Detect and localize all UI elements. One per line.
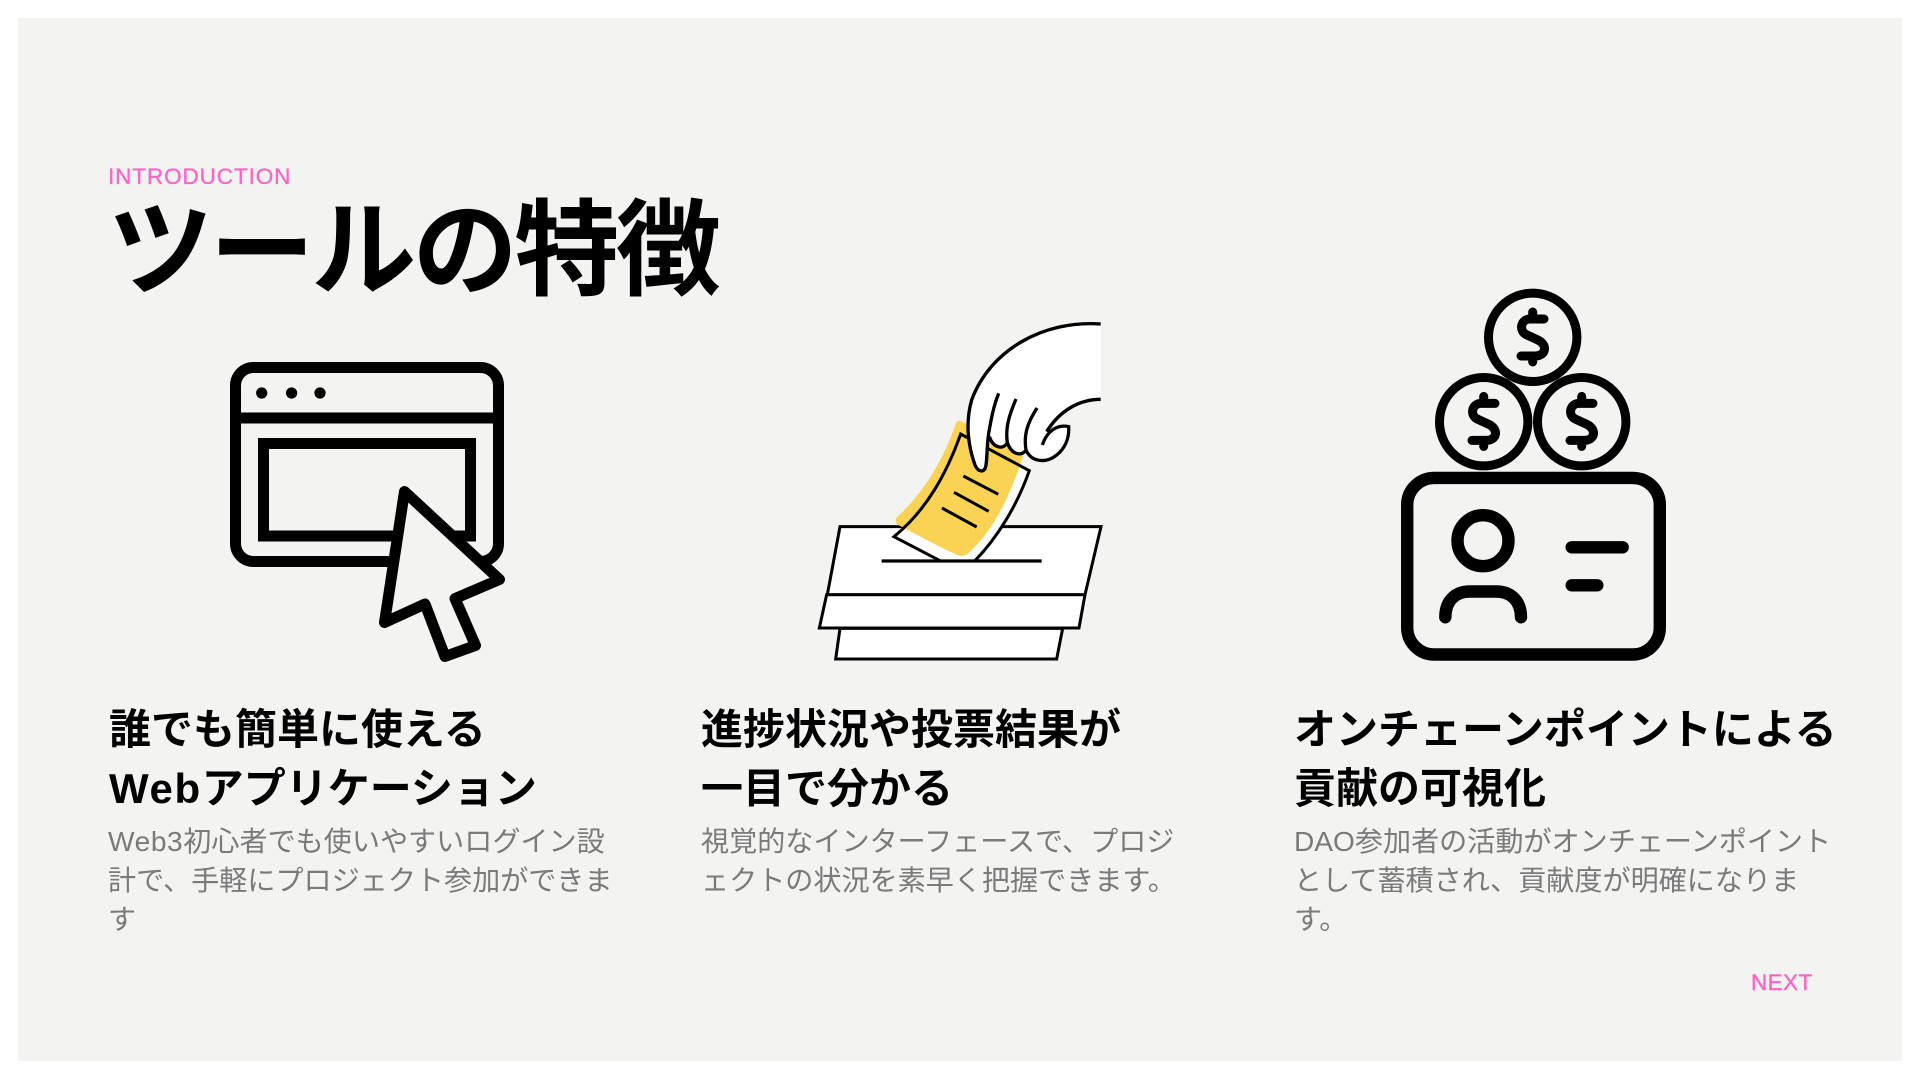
- ballot box top: [827, 527, 1101, 595]
- ballot yellow highlight: [896, 421, 1023, 556]
- next label: NEXT: [1751, 970, 1813, 995]
- hand fill: [968, 324, 1101, 471]
- heading: column 3: オンチェーンポイントによる: [1294, 706, 1837, 753]
- body text: column 1: す: [108, 904, 136, 935]
- body text: column 3: す。: [1294, 904, 1347, 935]
- body text: column 2: ェクトの状況を素早く把握できます。: [701, 865, 1176, 896]
- ballot box middle: [819, 595, 1085, 628]
- heading: column 1: 誰でも簡単に使える: [109, 706, 486, 753]
- heading: column 1: Webアプリケーション: [109, 765, 537, 812]
- mouse cursor: [384, 492, 500, 656]
- body text: column 3: として蓄積され、貢献度が明確になりま: [1294, 865, 1799, 896]
- body text: column 1: 計で、手軽にプロジェクト参加ができま: [108, 865, 613, 896]
- ballot paper outline: [894, 434, 1029, 561]
- heading: column 2: [701, 706, 1121, 812]
- ballot box base: [836, 628, 1063, 659]
- title: ツールの特徴: [108, 193, 718, 310]
- heading: column 2: 進捗状況や投票結果が: [701, 706, 1121, 753]
- section label: INTRODUCTION: INTRODUCTION: [108, 164, 291, 189]
- heading: column 3: [1294, 706, 1837, 812]
- body text: column 1: [108, 826, 613, 935]
- body text: column 3: DAO参加者の活動がオンチェーンポイント: [1294, 826, 1831, 857]
- ID card person head: [1458, 515, 1508, 566]
- heading: column 3: 貢献の可視化: [1294, 765, 1546, 812]
- ballot text lines: [942, 476, 998, 527]
- ballot paper: [894, 434, 1029, 561]
- body text: column 1: Web3初心者でも使いやすいログイン設: [108, 826, 605, 857]
- browser content box: [264, 444, 470, 536]
- ID card frame: [1407, 478, 1660, 654]
- heading: column 1: [109, 706, 537, 812]
- ID card person shoulders: [1445, 592, 1521, 617]
- ID card text lines: [1572, 547, 1623, 585]
- coin: left: [1440, 378, 1528, 466]
- box slot: [882, 556, 1042, 566]
- body text: column 2: [701, 826, 1176, 896]
- heading: column 2: 一目で分かる: [701, 765, 953, 812]
- browser frame: [236, 368, 498, 562]
- body text: column 2: 視覚的なインターフェースで、プロジ: [701, 826, 1174, 857]
- hand outline: [968, 324, 1101, 471]
- body text: column 3: [1294, 826, 1831, 935]
- coin: right: [1538, 378, 1626, 466]
- browser title bar divider: [236, 412, 498, 424]
- browser dots: [256, 387, 326, 399]
- coin: top: [1488, 293, 1577, 381]
